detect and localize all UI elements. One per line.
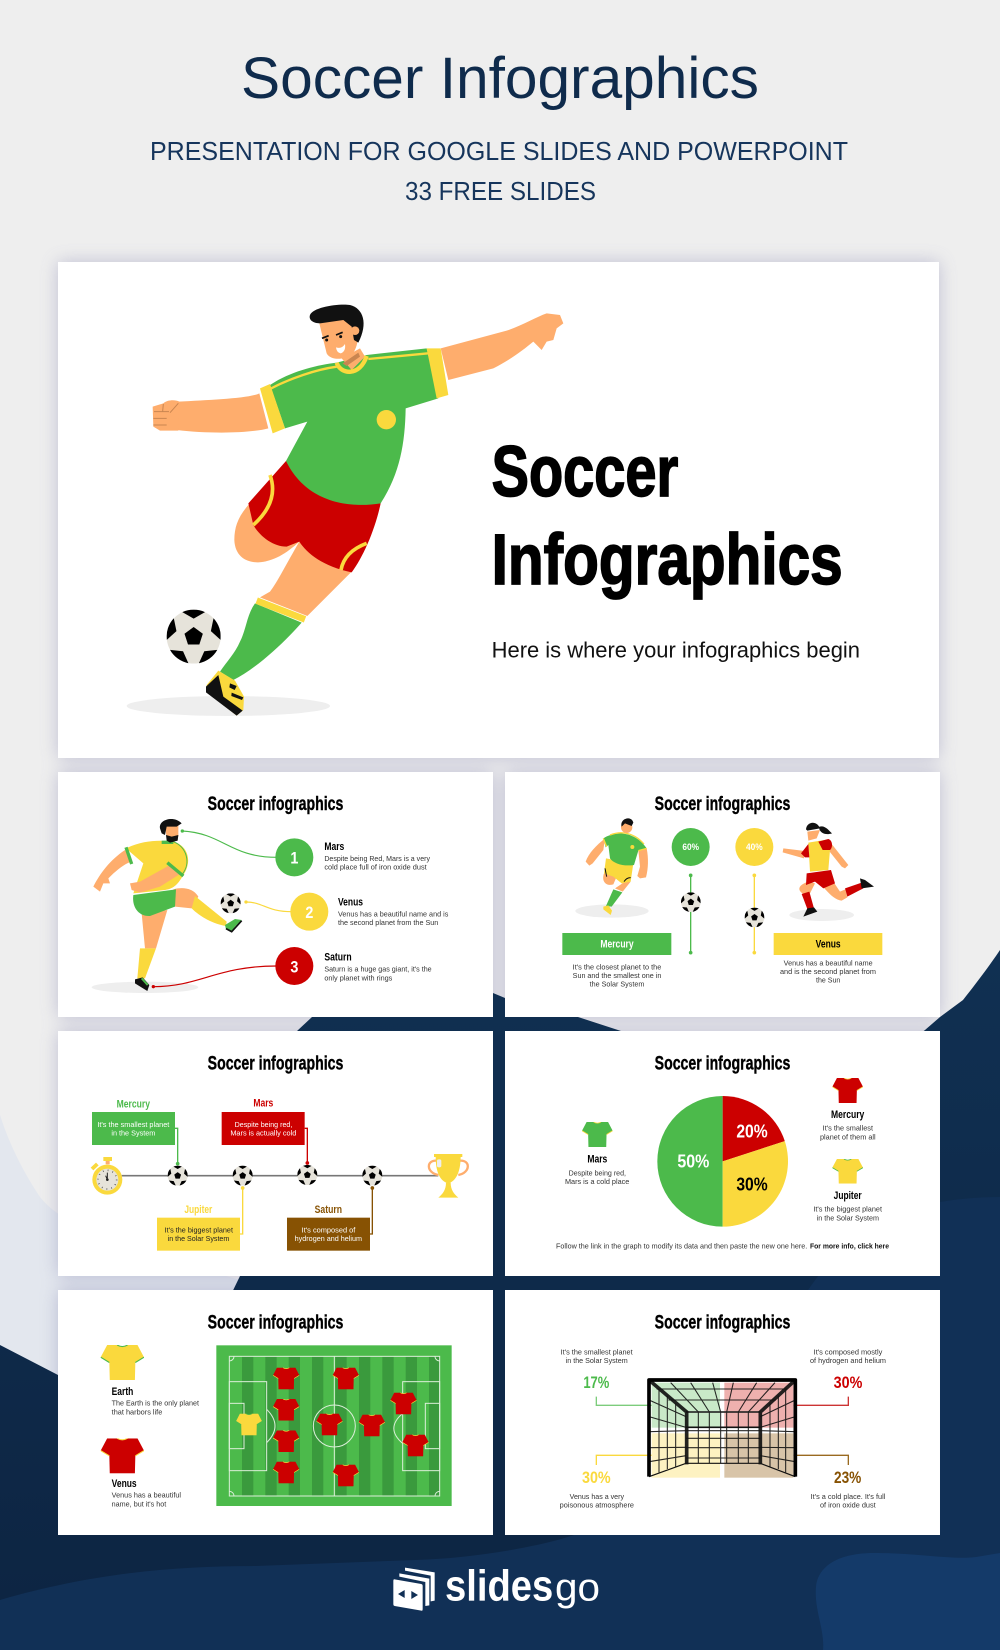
callout: Saturn: Saturn — [315, 1204, 342, 1216]
callout: Mars: Mars — [253, 1098, 273, 1110]
subtitle: 33 FREE SLIDES — [405, 176, 596, 206]
item 2: Venus — [290, 893, 448, 931]
stat: 23%: 23% — [834, 1468, 861, 1487]
stat: 30% red: 30% — [834, 1373, 862, 1392]
male player — [575, 818, 649, 918]
stat: 30% yellow — [560, 1468, 634, 1510]
item 3: Saturn — [275, 947, 432, 985]
label: Mercury: Sun and the smallest one in — [573, 971, 661, 980]
label: Venus: Venus has a beautiful name — [784, 958, 873, 967]
legend: Earth: Earth — [112, 1386, 134, 1398]
icon: soccer ball — [164, 610, 223, 665]
icon: stopwatch — [91, 1157, 122, 1195]
legend: Venus: name, but it's hot — [112, 1499, 167, 1508]
goal net chart — [649, 1380, 795, 1478]
callout: Mercury: Mercury — [117, 1098, 151, 1110]
slide title: Soccer infographics — [655, 794, 790, 815]
player illustration — [92, 819, 242, 993]
stat: 17%: 17% — [583, 1373, 609, 1392]
callout: Saturn: hydrogen and helium — [295, 1234, 362, 1243]
panel: pie chart slide — [505, 1031, 940, 1276]
stat: 30% yellow: Venus has a very — [570, 1492, 624, 1501]
legend: Mars: Mars is a cold place — [565, 1177, 629, 1186]
cover heading: Infographics — [492, 520, 843, 600]
timeline axis — [122, 1173, 438, 1178]
cover heading: Soccer — [492, 432, 678, 512]
legend: Mars — [565, 1122, 629, 1186]
vertical sliders — [680, 873, 765, 954]
legend: Jupiter — [813, 1159, 883, 1222]
legend: Mercury — [820, 1078, 876, 1141]
connector lines — [152, 829, 292, 988]
panel: numbered list slide — [58, 772, 493, 1017]
percent circles — [672, 828, 773, 866]
legend: Mercury: Mercury — [831, 1109, 865, 1121]
label: Mercury: It's the closest planet to the — [573, 962, 661, 971]
stat: 23%: of iron oxide dust — [820, 1501, 876, 1510]
percent circles: 60% — [682, 842, 700, 852]
callout: Jupiter — [157, 1186, 244, 1251]
panel: field slide — [58, 1290, 493, 1535]
slide title: Soccer infographics — [208, 1053, 343, 1074]
stat: 17%: in the Solar System — [566, 1356, 628, 1365]
footnote: For more info, click here — [810, 1241, 889, 1250]
label: Venus: Venus — [816, 939, 841, 951]
wordmark: slides — [445, 1562, 553, 1611]
stat: 30% yellow: 30% — [582, 1468, 611, 1487]
callout: Jupiter: in the Solar System — [168, 1234, 229, 1243]
subtitle: PRESENTATION FOR GOOGLE SLIDES AND POWERPOINT — [150, 136, 848, 166]
label: Venus: and is the second planet from — [780, 967, 876, 976]
pie chart: 30% — [736, 1173, 768, 1194]
legend: Jupiter: Jupiter — [834, 1190, 862, 1202]
callout: Mercury: It's the smallest planet — [97, 1120, 170, 1129]
item 1: Mars — [275, 838, 430, 876]
percent circles: 40% — [746, 842, 763, 852]
female player — [783, 823, 874, 921]
callout: Mars: Despite being red, — [235, 1120, 292, 1129]
pie chart — [657, 1096, 788, 1227]
legend: Mercury: planet of them all — [820, 1132, 876, 1141]
timeline balls — [167, 1165, 383, 1186]
item 1: Mars: cold place full of iron oxide dust — [324, 863, 427, 872]
item 1: Mars: Despite being Red, Mars is a very — [324, 854, 430, 863]
stat: 17%: It's the smallest planet — [561, 1347, 633, 1356]
slide title: Soccer infographics — [208, 1312, 343, 1333]
legend: Mercury: It's the smallest — [823, 1124, 874, 1133]
item 3: Saturn: 3 — [290, 957, 298, 976]
pie chart: 20% — [736, 1121, 768, 1142]
label: Venus — [774, 933, 882, 985]
title: Soccer Infographics — [241, 46, 759, 111]
panel: cover slide — [58, 262, 939, 758]
item 3: Saturn: Saturn — [324, 952, 352, 964]
slide title: Soccer infographics — [655, 1053, 790, 1074]
legend: Jupiter: It's the biggest planet — [813, 1205, 883, 1214]
item 1: Mars: 1 — [290, 849, 298, 868]
item 2: Venus: Venus — [338, 897, 363, 909]
slide title: Soccer infographics — [655, 1312, 790, 1333]
legend: Mars: Despite being red, — [569, 1168, 626, 1177]
legend: Venus: Venus — [112, 1478, 137, 1490]
logo: slidesgo — [393, 1562, 600, 1611]
callout: Jupiter: It's the biggest planet — [165, 1225, 234, 1234]
label: Mercury: Mercury — [600, 939, 634, 951]
cover heading — [492, 432, 843, 600]
legend: Jupiter: in the Solar System — [817, 1213, 879, 1222]
stat: 30% red — [810, 1347, 886, 1392]
icon: slides stack — [393, 1568, 435, 1611]
wordmark: go — [555, 1566, 600, 1610]
callout: Mercury: in the System — [111, 1129, 155, 1138]
legend: Mars: Mars — [587, 1154, 607, 1166]
stat: 30% red: of hydrogen and helium — [810, 1356, 886, 1365]
panel: goal slide — [505, 1290, 940, 1535]
pie chart: 50% — [677, 1151, 710, 1172]
item 3: Saturn: Saturn is a huge gas giant, it's the — [324, 965, 432, 974]
callout: Jupiter: Jupiter — [184, 1204, 213, 1216]
panel: comparison slide — [505, 772, 940, 1017]
item 2: Venus: 2 — [305, 903, 313, 922]
footnote: Follow the link in the graph to modify its data and then paste the new one here. — [556, 1241, 807, 1250]
legend: Venus: Venus has a beautiful — [112, 1491, 181, 1500]
callout: Mars: Mars is actually cold — [230, 1129, 296, 1138]
stat: 30% yellow: poisonous atmosphere — [560, 1501, 634, 1510]
callout: Mars — [222, 1098, 309, 1165]
legend: Earth: that harbors life — [112, 1407, 162, 1416]
item 3: Saturn: only planet with rings — [324, 973, 392, 982]
legend: Venus — [101, 1438, 181, 1508]
panel: timeline slide — [58, 1031, 493, 1276]
stat: 23% — [811, 1468, 886, 1510]
callout: Saturn — [287, 1186, 374, 1251]
legend: Earth: The Earth is the only planet — [112, 1399, 200, 1408]
label: Mercury: the Solar System — [590, 980, 644, 989]
stat: 23%: It's a cold place. It's full — [811, 1492, 886, 1501]
cover subtitle: Here is where your infographics begin — [492, 637, 860, 662]
label: Venus: the Sun — [816, 976, 840, 985]
legend: Earth — [101, 1345, 200, 1416]
callout: Saturn: It's composed of — [302, 1225, 356, 1234]
subtitle — [150, 136, 848, 206]
stat: 17% — [561, 1347, 633, 1392]
icon: trophy — [429, 1154, 468, 1198]
stat: 30% red: It's composed mostly — [814, 1347, 882, 1356]
callout: Mercury — [92, 1098, 179, 1165]
item 1: Mars: Mars — [324, 841, 344, 853]
label: Mercury — [562, 933, 671, 989]
item 2: Venus: Venus has a beautiful name and is — [338, 910, 448, 919]
player illustration — [127, 305, 563, 716]
slide title: Soccer infographics — [208, 794, 343, 815]
icon: soccer ball — [220, 893, 241, 914]
item 2: Venus: the second planet from the Sun — [338, 918, 438, 927]
connector lines — [596, 1397, 848, 1465]
soccer field — [216, 1345, 452, 1506]
